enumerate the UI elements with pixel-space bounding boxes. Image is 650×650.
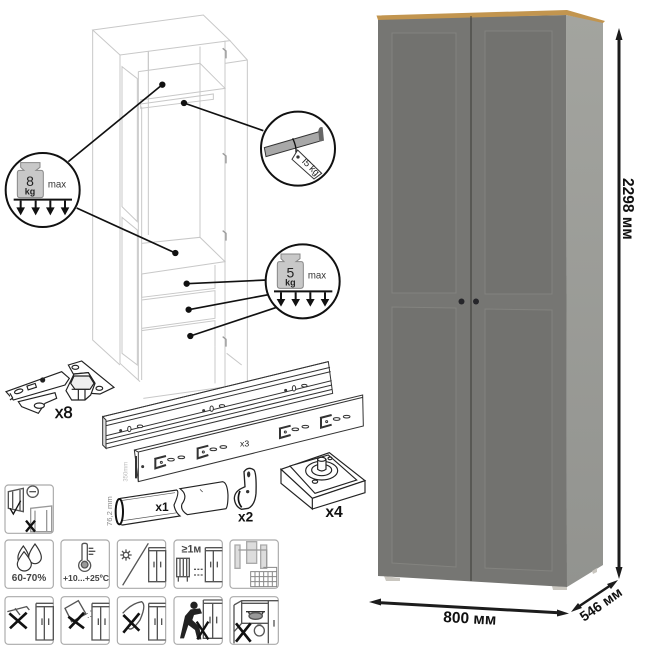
icon: no liquid: [65, 601, 109, 640]
door handles: [458, 298, 479, 304]
door gap: [470, 16, 472, 581]
rail bracket with x2 quantity: x2: [238, 509, 254, 524]
icon: assembly by cell grid: [235, 542, 277, 587]
callout: 5 kg max drawer load: 5: [286, 264, 294, 280]
callout: 15 kg rail load: [261, 112, 335, 186]
callout: 5 kg max drawer load: max: [308, 271, 326, 282]
callout: 8 kg max shelf load: max: [48, 179, 66, 190]
icon: no direct sunlight: [120, 543, 166, 585]
care icons: +10...+25ºC: [63, 573, 110, 583]
adjustable foot with x4 quantity: x4: [325, 504, 343, 521]
width label: 800 мм: [443, 609, 497, 629]
width dimension arrow: [369, 598, 569, 616]
line drawing: open wardrobe: [93, 15, 247, 405]
icon: level assembly check: [8, 486, 52, 532]
hinge with x8 quantity: x8: [55, 403, 73, 422]
drawer slide rails with x3 quantity: [103, 362, 363, 482]
wardrobe feet: [384, 568, 597, 590]
right door panels: [485, 31, 552, 571]
callout: 8 kg max shelf load: kg: [25, 186, 35, 196]
callout: 15 kg rail load: I5 kg: [300, 156, 321, 177]
icon: humidity drops: [17, 544, 41, 571]
height label: 2298 мм: [619, 178, 636, 240]
height dimension arrow: [616, 28, 622, 579]
care icons: 60-70%: [12, 573, 46, 584]
callout: 8 kg max shelf load: [6, 153, 80, 227]
care icons: [5, 485, 278, 644]
icon: no cleaning tool: [7, 603, 53, 640]
hanging rail with x1 quantity: [105, 482, 228, 526]
callout: 5 kg max drawer load: kg: [285, 278, 296, 288]
hinge with x8 quantity: [6, 361, 114, 422]
wardrobe door front: [378, 15, 567, 587]
wardrobe side panel: [566, 15, 603, 587]
icon: no cloth: [123, 602, 166, 640]
icon: do not push: [180, 600, 222, 639]
drawer slide rails with x3 quantity: 350mm: [123, 462, 129, 482]
wardrobe worktop: [376, 10, 605, 23]
callout: 8 kg max shelf load: 8: [26, 173, 34, 189]
callout: 5 kg max drawer load: [266, 244, 340, 318]
callout lines and anchor dots: [68, 82, 277, 338]
adjustable foot with x4 quantity: [281, 453, 365, 521]
icon: thermometer: [79, 543, 95, 571]
icon: distance from heater: ≥1м: [182, 544, 201, 556]
hanging rail with x1 quantity: x1: [155, 500, 169, 514]
wardrobe product photo: [376, 10, 605, 590]
left door panels: [392, 33, 456, 567]
icon: no overload: [234, 601, 278, 643]
drawer slide rails with x3 quantity: x3: [240, 439, 249, 449]
depth label: 546 мм: [577, 584, 625, 624]
rail bracket with x2 quantity: [234, 468, 256, 524]
depth dimension arrow: [571, 580, 618, 612]
hanging rail with x1 quantity: 76,2 mm: [105, 496, 114, 526]
